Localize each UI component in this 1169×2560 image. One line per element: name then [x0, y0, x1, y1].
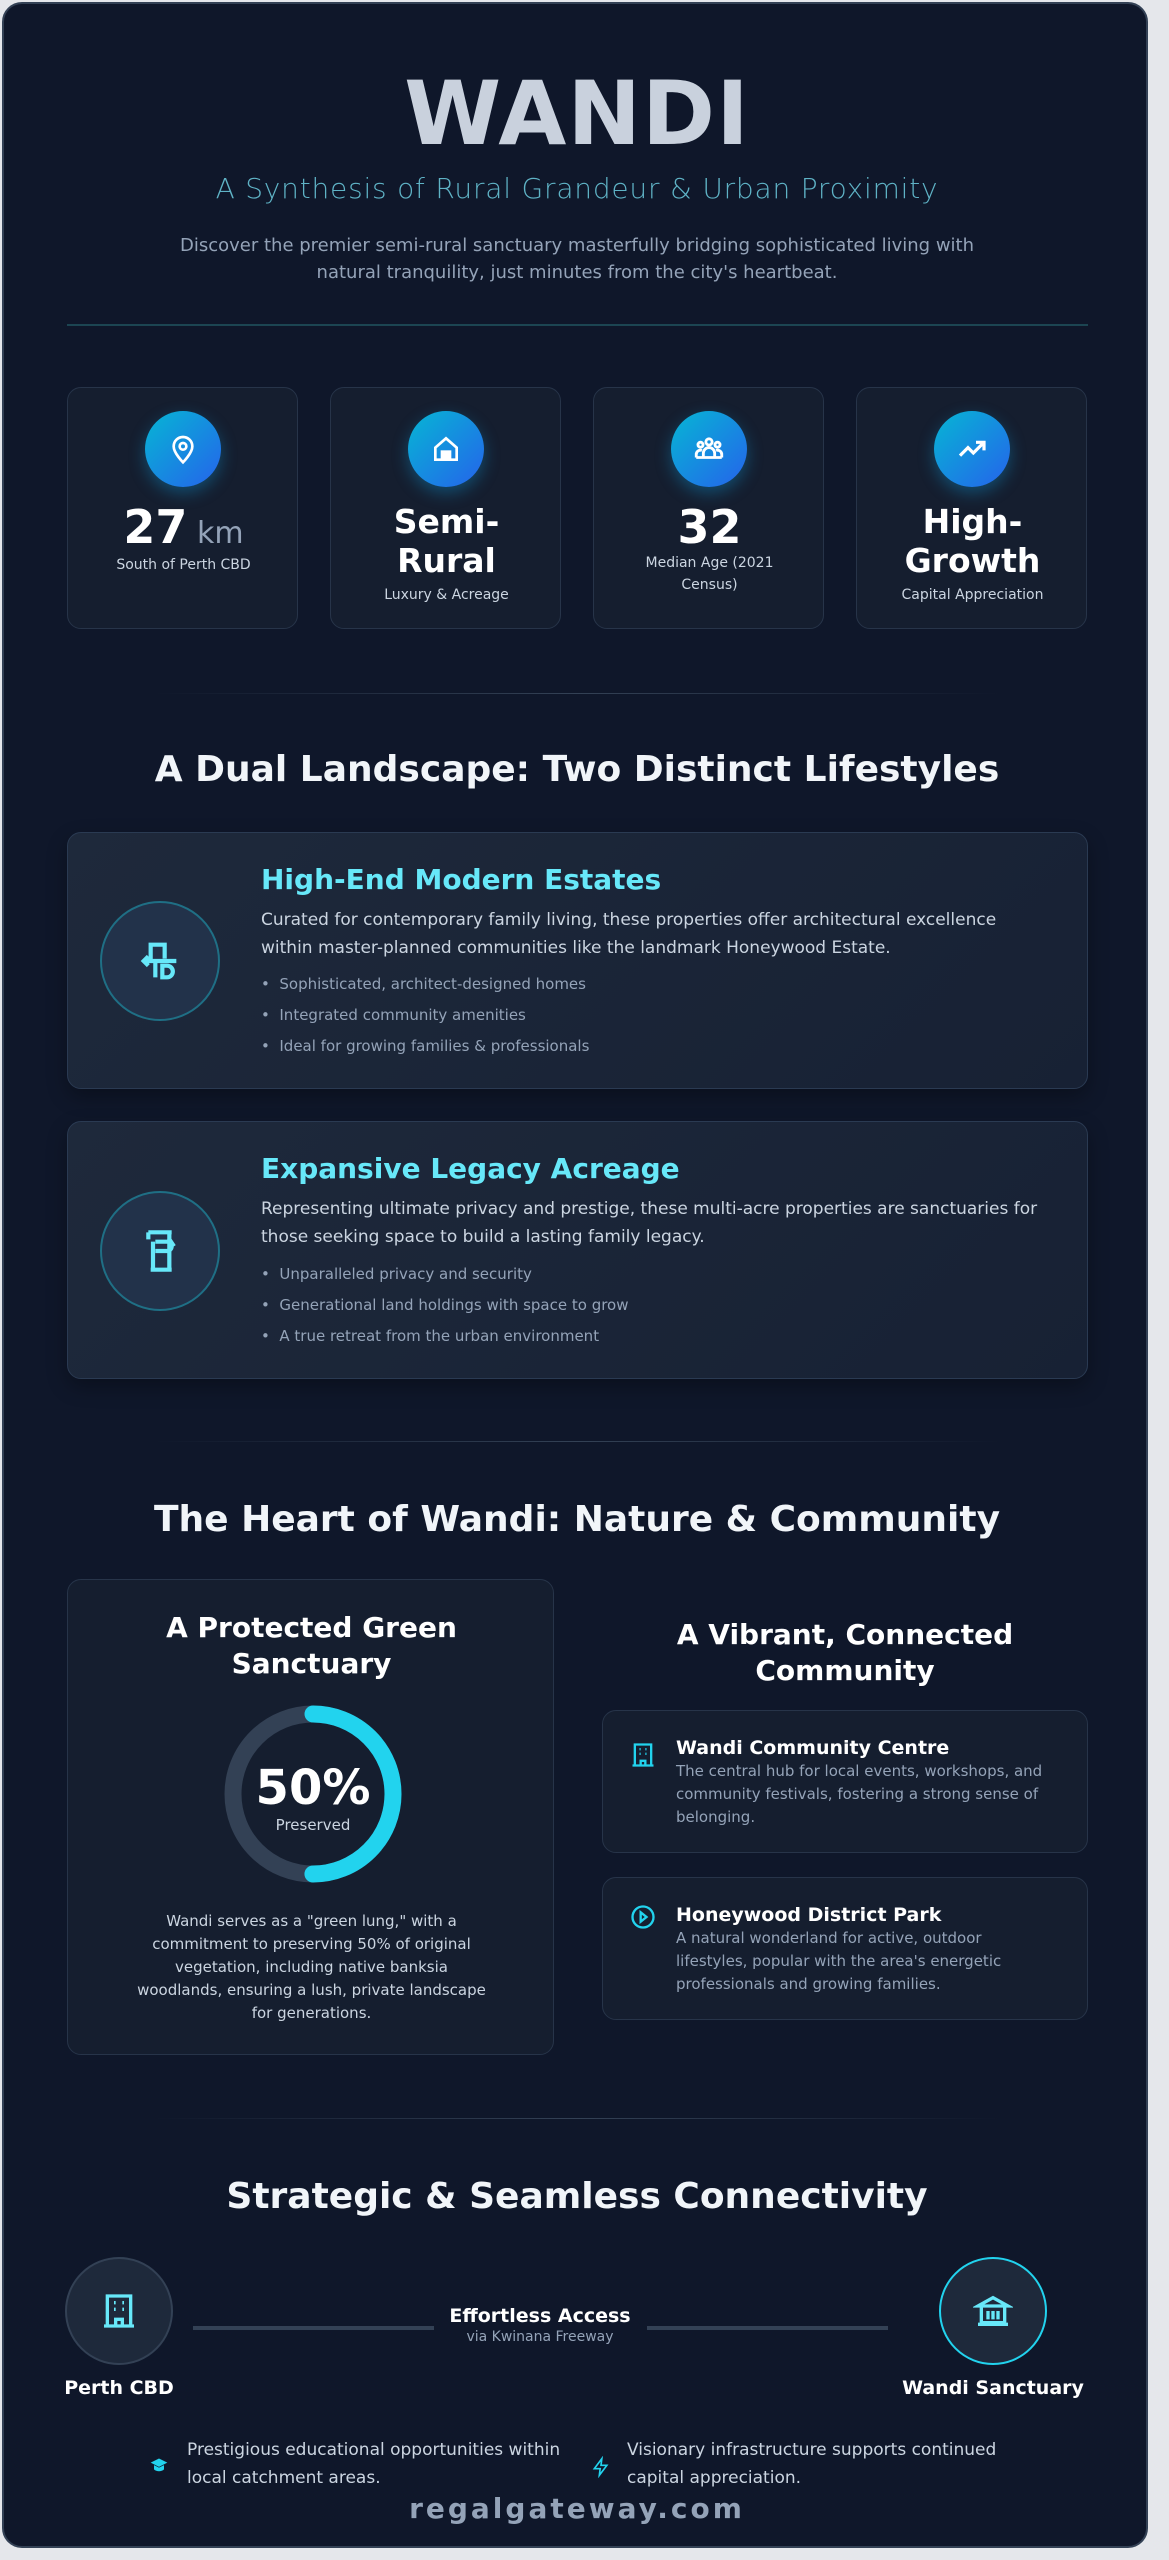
- label: effortless access: via Kwinana Freeway: [466, 2329, 614, 2345]
- icon: people: [671, 411, 747, 487]
- panel: green sanctuary: [67, 1579, 554, 2055]
- icon: acreage: [100, 1191, 220, 1311]
- stat: semi-rural: [384, 502, 509, 603]
- title and text: Honeywood District Park: [676, 1904, 941, 1926]
- bullet list: • Ideal for growing families & professionals: [261, 1037, 589, 1055]
- title: A Protected Green: [166, 1611, 457, 1644]
- stat: semi-rural: Luxury & Acreage: [384, 587, 509, 603]
- stat: high-growth: Growth: [905, 541, 1040, 580]
- donut chart: 50% preserved: 50%: [256, 1760, 370, 1816]
- feature: education: Prestigious educational opportunities within local catchment areas.: [187, 2440, 560, 2488]
- stat: 32: Median Age (2021 Census): [646, 555, 774, 593]
- node: Perth CBD: [64, 2257, 174, 2399]
- title: WANDI: [404, 62, 750, 165]
- heading: heart of wandi: The Heart of Wandi: Nature & Community: [154, 1499, 1000, 1540]
- donut chart: 50% preserved: Preserved: [276, 1816, 350, 1834]
- bullet list: [261, 975, 589, 1055]
- stat: 27 km: South of Perth CBD: [116, 557, 251, 573]
- title and text: A natural wonderland for active, outdoor lifestyles, popular with the area's energetic professionals and growing families.: [676, 1929, 1001, 1993]
- icon: estate: [100, 901, 220, 1021]
- card: community centre: [602, 1710, 1088, 1853]
- description: Wandi serves as a "green lung," with a commitment to preserving 50% of original vegetation, including native banksia woodlands, ensuring a lush, private landscape for generations.: [137, 1912, 486, 2022]
- stat: 32: [646, 500, 774, 593]
- icon: play circle: [631, 1905, 655, 1929]
- bullet list: • Generational land holdings with space to grow: [261, 1296, 628, 1314]
- stat card: semi-rural: [330, 387, 561, 629]
- stat: 27 km: 27 km: [123, 500, 244, 554]
- stat: semi-rural: Semi-: [394, 502, 499, 541]
- node: Wandi Sanctuary: [902, 2257, 1084, 2399]
- stat card: median age: [593, 387, 824, 629]
- icon: house: [408, 411, 484, 487]
- heading: vibrant community: A Vibrant, Connected: [677, 1618, 1013, 1651]
- heading: connectivity: Strategic & Seamless Connectivity: [226, 2176, 928, 2217]
- bullet list: • Unparalleled privacy and security: [261, 1265, 532, 1283]
- footer: website: regalgateway.com: [409, 2492, 745, 2525]
- label: effortless access: Effortless Access: [449, 2305, 631, 2327]
- bullet list: • Sophisticated, architect-designed homes: [261, 975, 586, 993]
- stat: 27 km: [116, 500, 251, 573]
- panel: legacy acreage: [67, 1121, 1088, 1379]
- title and text: Wandi Community Centre: [676, 1737, 949, 1759]
- node: Wandi Sanctuary: Wandi Sanctuary: [902, 2377, 1084, 2399]
- stat: semi-rural: Rural: [397, 541, 496, 580]
- heading: dual landscape: A Dual Landscape: Two Distinct Lifestyles: [155, 749, 999, 790]
- title: High-End Modern Estates: [261, 863, 661, 896]
- connector line: [193, 2326, 434, 2330]
- icon: building: [632, 1743, 654, 1767]
- heading: vibrant community: Community: [755, 1654, 935, 1687]
- bullet list: • Integrated community amenities: [261, 1006, 526, 1024]
- stat: 32: 32: [677, 500, 742, 554]
- panel: modern estates: [67, 832, 1088, 1089]
- heading: vibrant community: [677, 1618, 1013, 1687]
- feature: infrastructure: Visionary infrastructure supports continued capital appreciation.: [627, 2440, 996, 2488]
- icon: trend up: [934, 411, 1010, 487]
- stat: high-growth: [902, 502, 1043, 603]
- stat: high-growth: High-: [923, 502, 1022, 541]
- label: effortless access: [449, 2305, 631, 2345]
- stat card: distance: [67, 387, 298, 629]
- node: Perth CBD: Perth CBD: [64, 2377, 174, 2399]
- title and text: The central hub for local events, workshops, and community festivals, fostering a strong sense of belonging.: [676, 1762, 1042, 1826]
- title: [166, 1611, 457, 1680]
- stat card: growth: [856, 387, 1087, 629]
- intro text: Discover the premier semi-rural sanctuary masterfully bridging sophisticated living with natural tranquility, just minutes from the city's heartbeat.: [180, 235, 974, 283]
- bullet list: [261, 1265, 628, 1345]
- description: Representing ultimate privacy and prestige, these multi-acre properties are sanctuaries for those seeking space to build a lasting family legacy.: [261, 1199, 1037, 1247]
- title: Expansive Legacy Acreage: [261, 1152, 680, 1185]
- icon: location pin: [145, 411, 221, 487]
- donut chart: 50% preserved: [224, 1706, 402, 1882]
- title: Sanctuary: [232, 1647, 391, 1680]
- stat: high-growth: Capital Appreciation: [902, 587, 1043, 603]
- subtitle: A Synthesis of Rural Grandeur & Urban Proximity: [216, 172, 938, 205]
- description: Curated for contemporary family living, these properties offer architectural excellence within master-planned communities like the landmark Honeywood Estate.: [261, 910, 996, 958]
- card: district park: [602, 1877, 1088, 2020]
- bullet list: • A true retreat from the urban environment: [261, 1327, 599, 1345]
